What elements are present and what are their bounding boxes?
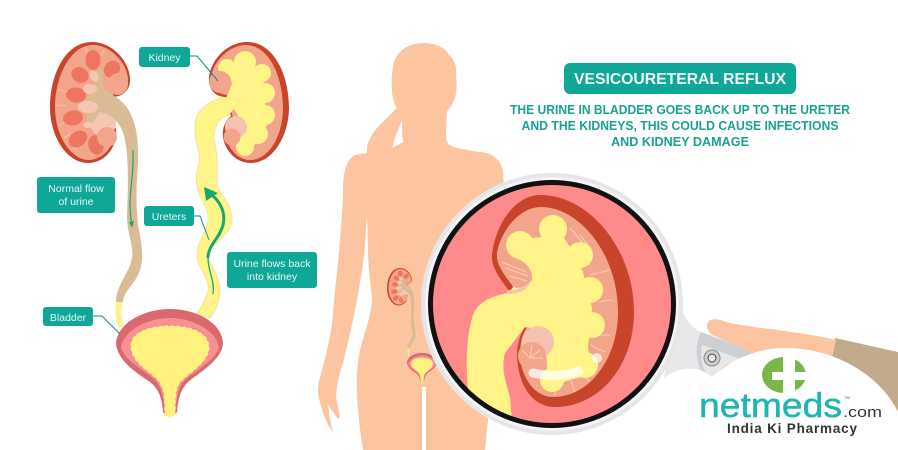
label: Urine flows back into kidney: into kidney xyxy=(247,271,298,283)
yellow urine filling kidney xyxy=(195,51,275,318)
label: Normal flow of urine xyxy=(37,177,115,213)
label: Normal flow of urine: Normal flow xyxy=(48,183,104,195)
title pill xyxy=(564,63,796,94)
icon: green cross xyxy=(762,355,808,395)
magnified kidney xyxy=(467,195,634,420)
magnifying glass lens xyxy=(421,173,683,435)
magnifying glass handle xyxy=(664,298,765,392)
netmeds logo: netmeds xyxy=(699,387,842,425)
description text: THE URINE IN BLADDER GOES BACK UP TO THE URETER xyxy=(510,103,850,117)
netmeds logo: India Ki Pharmacy xyxy=(727,421,857,436)
hand and sleeve xyxy=(698,319,898,420)
description text: AND KIDNEY DAMAGE xyxy=(611,135,749,149)
label: Bladder xyxy=(43,307,120,334)
magnified lower lobe xyxy=(522,326,554,358)
label: Ureters: Ureters xyxy=(152,211,186,223)
label: Kidney xyxy=(139,47,218,81)
reflux kidney and ureter xyxy=(195,42,289,318)
description text: AND THE KIDNEYS, THIS COULD CAUSE INFECTIONS xyxy=(522,119,838,133)
label: Urine flows back into kidney: Urine flows back xyxy=(233,258,311,270)
title pill: VESICOURETERAL REFLUX xyxy=(574,71,786,88)
renal pyramids xyxy=(62,50,124,157)
label: Ureters xyxy=(144,206,209,240)
normal kidney with ureter xyxy=(50,42,142,328)
small kidney on body xyxy=(387,268,416,357)
label: Urine flows back into kidney xyxy=(227,252,317,288)
label: Kidney: Kidney xyxy=(148,52,181,64)
label: Normal flow of urine: of urine xyxy=(58,196,94,208)
netmeds logo: .com xyxy=(843,404,882,421)
bladder xyxy=(116,309,223,417)
magnified urine xyxy=(467,215,605,420)
female body silhouette xyxy=(318,43,510,450)
netmeds logo xyxy=(699,355,882,436)
renal pelvis and ureter xyxy=(85,68,142,302)
white logo backdrop xyxy=(690,348,898,450)
green arrow: reflux flow xyxy=(204,187,224,294)
small bladder on body xyxy=(407,353,437,383)
label: Bladder: Bladder xyxy=(50,312,87,324)
magnified upper lobe xyxy=(497,251,532,288)
description text xyxy=(510,103,850,149)
ponytail gap xyxy=(392,120,403,148)
green arrow: normal flow xyxy=(129,150,134,228)
white reflective marks xyxy=(533,371,579,375)
netmeds logo: TM xyxy=(844,395,850,400)
